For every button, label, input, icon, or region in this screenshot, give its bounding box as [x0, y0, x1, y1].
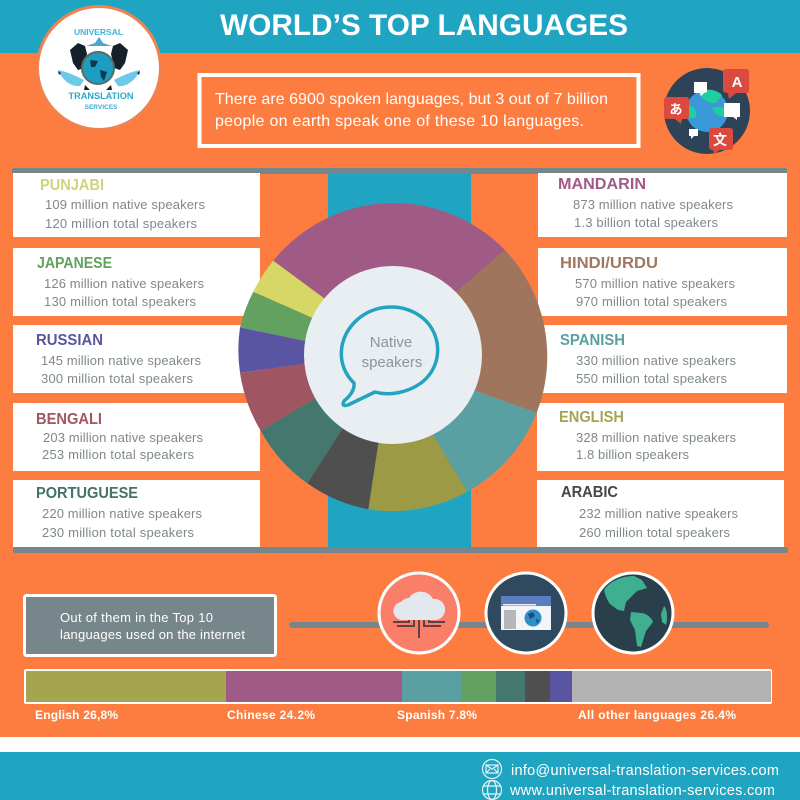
icon: cloud network [379, 573, 459, 653]
icon: globe with translation bubbles: 文 [713, 132, 727, 148]
card: Japanese: 126 million native speakers [44, 276, 204, 291]
top rule [12, 168, 787, 174]
email address: info@universal-translation-services.com [511, 763, 779, 779]
card: Japanese: 130 million total speakers [44, 294, 196, 309]
logo: UNIVERSAL [74, 27, 123, 37]
bar label: English: English 26,8% [35, 708, 118, 722]
card: Portuguese [13, 480, 260, 547]
intro text box [200, 75, 638, 146]
card: Mandarin: MANDARIN [558, 176, 646, 193]
icon: globe americas [593, 573, 673, 653]
card: Arabic: 260 million total speakers [579, 525, 730, 540]
card: Portuguese: 220 million native speakers [42, 506, 202, 521]
logo: SERVICES [85, 104, 118, 111]
slice: Punjabi [253, 261, 393, 355]
icon: email [482, 760, 502, 778]
card: Spanish: 330 million native speakers [576, 353, 736, 368]
card: Punjabi: 109 million native speakers [45, 197, 206, 212]
slice: Japanese [240, 292, 393, 355]
card: Japanese: JAPANESE [37, 255, 112, 272]
connector line [289, 622, 769, 628]
header band [0, 0, 800, 53]
slice: Bengali [240, 355, 393, 431]
centre label: Native [370, 334, 412, 351]
card: Russian: RUSSIAN [36, 332, 103, 349]
card: Portuguese: PORTUGUESE [36, 485, 138, 502]
logo: TRANSLATION [68, 91, 134, 101]
internet callout box [24, 596, 276, 656]
bar label: Chinese: Chinese 24.2% [227, 708, 315, 722]
intro text box: people on earth speak one of these 10 languages. [215, 113, 584, 130]
icon: globe with translation bubbles [664, 68, 750, 154]
card: English [537, 403, 784, 471]
white strip [0, 737, 800, 752]
slice: Spanish [393, 355, 537, 492]
icon: globe with translation bubbles: あ [669, 102, 683, 117]
bottom rule [13, 547, 788, 553]
icon: website globe [482, 780, 502, 800]
slice: Portuguese [261, 355, 393, 483]
card: Russian: 300 million total speakers [41, 371, 194, 386]
slice: Arabic [307, 355, 393, 509]
internet callout box: Out of them in the Top 10 [60, 610, 213, 625]
speech bubble [341, 307, 438, 406]
slice: Hindi/Urdu [393, 250, 547, 413]
card: Hindi/Urdu: HINDI/URDU [560, 255, 658, 272]
card: English: ENGLISH [559, 409, 624, 426]
card: Punjabi: 120 million total speakers [45, 216, 198, 231]
card: Mandarin: 873 million native speakers [573, 197, 734, 212]
card: Russian: 145 million native speakers [41, 353, 202, 368]
title: WORLD’S TOP LANGUAGES [220, 9, 628, 42]
central teal band [328, 172, 471, 548]
card: Hindi/Urdu: 970 million total speakers [576, 294, 728, 309]
logo [36, 5, 162, 131]
card: Punjabi [13, 173, 260, 237]
card: Portuguese: 230 million total speakers [42, 525, 194, 540]
card: Bengali: 253 million total speakers [42, 447, 194, 462]
icon: globe with translation bubbles: A [732, 74, 743, 91]
card: Punjabi: PUNJABI [40, 177, 104, 194]
card: Bengali: BENGALI [36, 411, 102, 428]
card: Arabic: ARABIC [561, 484, 618, 501]
card: Spanish: 550 million total speakers [576, 371, 728, 386]
stacked bar: internet language share [24, 669, 772, 704]
card: English: 328 million native speakers [576, 430, 736, 445]
card: Japanese [13, 248, 260, 316]
card: Mandarin: 1.3 billion total speakers [574, 215, 718, 230]
card: Arabic [537, 480, 784, 547]
card: Russian [13, 325, 260, 393]
card: Spanish [538, 325, 787, 393]
slice: Russian [238, 327, 393, 373]
centre label second line: speakers [362, 354, 422, 371]
intro text box: There are 6900 spoken languages, but 3 out of 7 billion [215, 91, 608, 108]
card: Spanish: SPANISH [560, 332, 625, 349]
card: Hindi/Urdu: 570 million native speakers [575, 276, 736, 291]
card: Bengali: 203 million native speakers [43, 430, 204, 445]
slice: English [368, 355, 467, 511]
website address: www.universal-translation-services.com [509, 783, 775, 799]
internet callout box: languages used on the internet [60, 627, 245, 642]
card: Mandarin [538, 173, 787, 237]
card: Arabic: 232 million native speakers [579, 506, 738, 521]
card: English: 1.8 billion speakers [576, 447, 690, 462]
footer band [0, 752, 800, 800]
icon: browser window [486, 573, 566, 653]
card: Bengali [13, 403, 260, 471]
donut chart: native speakers [238, 203, 547, 511]
bar label: all other: All other languages 26.4% [578, 708, 736, 722]
donut centre [304, 266, 482, 444]
card: Hindi/Urdu [538, 248, 787, 316]
slice: Mandarin [273, 203, 505, 355]
bar label: Spanish: Spanish 7.8% [397, 708, 477, 722]
